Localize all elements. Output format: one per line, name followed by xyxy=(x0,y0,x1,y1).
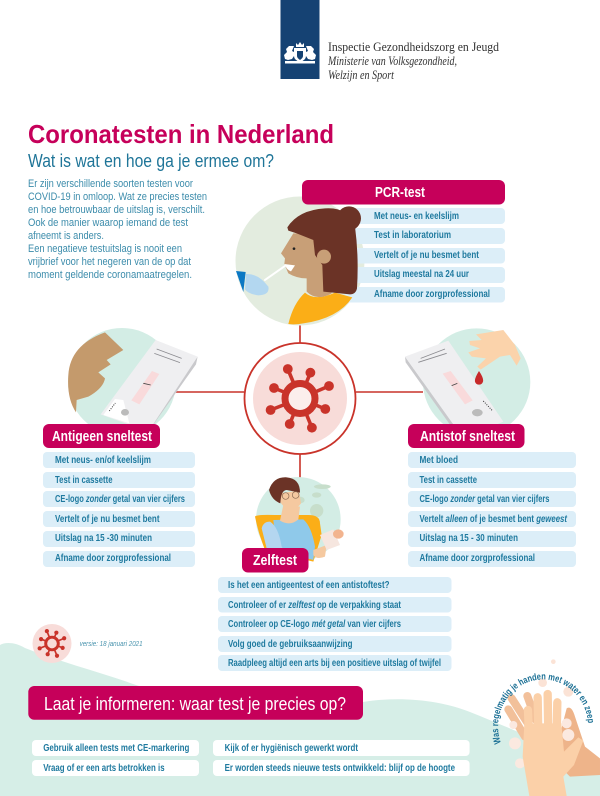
ministry name: Welzijn en Sport xyxy=(328,67,394,82)
panel: Antistof sneltest xyxy=(405,328,576,567)
Antigeen list: Uitslag na 15 -30 minuten xyxy=(55,532,152,544)
icon: hand, blood drop and cassette xyxy=(405,328,530,438)
icon: person doing self test xyxy=(255,477,344,562)
tips list: Vraag of er een arts betrokken is xyxy=(43,762,165,774)
Zelftest list: Volg goed de gebruiksaanwijzing xyxy=(228,638,352,650)
Antistof heading: Antistof sneltest xyxy=(420,429,515,445)
PCR heading xyxy=(302,180,505,204)
Antistof list: Test in cassette xyxy=(420,474,477,486)
logo: Rijksoverheid xyxy=(280,0,320,79)
PCR list: Uitslag meestal na 24 uur xyxy=(374,268,469,280)
intro text: Een negatieve testuitslag is nooit een xyxy=(28,243,182,255)
Antigeen list xyxy=(43,452,195,567)
Antigeen heading xyxy=(43,424,160,448)
Antistof list xyxy=(408,452,576,567)
icon: face and antigen cassette xyxy=(68,328,198,436)
ministry name: Ministerie van Volksgezondheid, xyxy=(327,53,457,68)
Antistof list: Vertelt alleen of je besmet bent geweest xyxy=(420,513,567,525)
intro text: en hoe betrouwbaar de uitslag is, verschilt. xyxy=(28,204,205,216)
Antigeen list: Vertelt of je nu besmet bent xyxy=(55,513,160,525)
intro text: vrijbrief voor het negeren van de op dat xyxy=(28,256,192,268)
icon: small virus xyxy=(32,624,72,663)
Antigeen list: Afname door zorgprofessional xyxy=(55,552,171,564)
Antistof list: Met bloed xyxy=(420,454,458,466)
intro text: moment geldende coronamaatregelen. xyxy=(28,269,192,281)
Zelftest list xyxy=(218,577,452,671)
Zelftest list: Controleer of er zelftest op de verpakking staat xyxy=(228,599,401,611)
PCR list: Afname door zorgprofessional xyxy=(374,288,490,300)
background wave xyxy=(0,643,600,796)
curved slogan: Was regelmatig je handen met water en zeep. xyxy=(492,673,593,745)
Antistof heading xyxy=(408,424,524,448)
PCR list: Met neus- en keelslijm xyxy=(374,210,459,222)
intro text: Er zijn verschillende soorten testen voor xyxy=(28,178,193,190)
connector lines xyxy=(176,320,423,478)
PCR list: Test in laboratorium xyxy=(374,229,451,241)
ministry name xyxy=(327,39,499,82)
Antistof list: CE-logo zonder getal van vier cijfers xyxy=(420,493,550,505)
panel: Zelftest xyxy=(218,477,452,671)
subtitle: Wat is wat en hoe ga je ermee om? xyxy=(28,150,274,171)
panel: PCR-test xyxy=(236,180,505,326)
Zelftest heading xyxy=(242,548,308,572)
intro text: COVID-19 in omloop. Wat ze precies testen xyxy=(28,191,207,203)
Antistof list: Uitslag na 15 - 30 minuten xyxy=(420,532,518,544)
panel: Antigeen sneltest xyxy=(43,328,198,567)
PCR heading: PCR-test xyxy=(375,185,425,201)
banner: Laat je informeren: waar test je precies op? xyxy=(44,693,346,714)
tips list xyxy=(32,740,470,776)
icon: washing hands xyxy=(508,659,600,796)
banner xyxy=(28,686,363,720)
tips list: Gebruik alleen tests met CE-markering xyxy=(43,742,189,754)
Zelftest list: Raadpleeg altijd een arts bij een positieve uitslag of twijfel xyxy=(228,657,441,669)
Zelftest list: Controleer op CE-logo mét getal van vier cijfers xyxy=(228,618,401,630)
Antigeen list: Test in cassette xyxy=(55,474,113,486)
PCR list xyxy=(345,208,505,302)
tips list: Er worden steeds nieuwe tests ontwikkeld: blijf op de hoogte xyxy=(225,762,455,774)
intro text xyxy=(28,178,207,281)
tips list: Kijk of er hygiënisch gewerkt wordt xyxy=(225,742,358,754)
intro text: Ook de manier waarop iemand de test xyxy=(28,217,189,229)
Antigeen list: CE-logo zonder getal van vier cijfers xyxy=(55,493,185,505)
Antigeen list: Met neus- en/of keelslijm xyxy=(55,454,151,466)
PCR illustration circle xyxy=(236,196,364,326)
title: Coronatesten in Nederland xyxy=(28,119,334,149)
Antigeen heading: Antigeen sneltest xyxy=(52,429,152,445)
Antistof list: Afname door zorgprofessional xyxy=(420,552,535,564)
Zelftest heading: Zelftest xyxy=(253,553,297,569)
ministry name: Inspectie Gezondheidszorg en Jeugd xyxy=(328,39,499,54)
version date: versie: 18 januari 2021 xyxy=(80,641,143,648)
icon: person with swab xyxy=(236,206,361,324)
Zelftest list: Is het een antigeentest of een antistoftest? xyxy=(228,579,390,591)
icon: central virus xyxy=(244,343,356,454)
intro text: afneemt is anders. xyxy=(28,230,104,242)
PCR list: Vertelt of je nu besmet bent xyxy=(374,249,479,261)
